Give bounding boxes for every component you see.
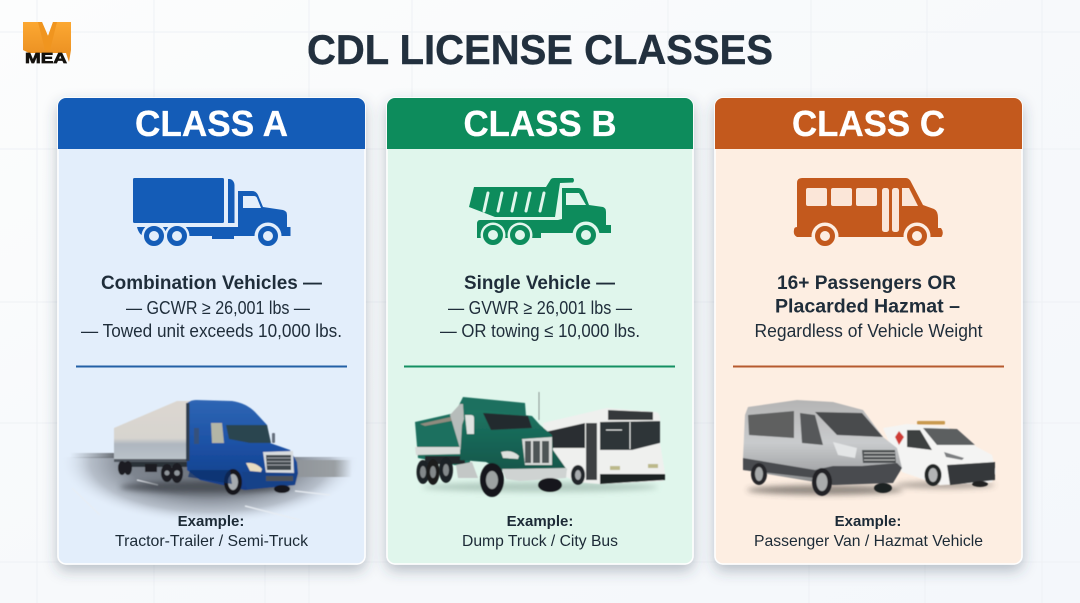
card C header bbox=[715, 98, 1022, 149]
card A description: — GCWR ≥ 26,001 lbs — bbox=[126, 298, 310, 318]
card A example: Tractor-Trailer / Semi-Truck bbox=[115, 533, 309, 550]
panel: Class A bbox=[58, 98, 365, 564]
card A example: Example: bbox=[178, 513, 244, 530]
photo: dump truck and city bus bbox=[415, 392, 665, 497]
card A description bbox=[81, 272, 342, 341]
card C description: Placarded Hazmat – bbox=[775, 296, 960, 318]
card A header: CLASS A bbox=[135, 103, 288, 144]
photo: passenger van and hazmat van bbox=[743, 400, 996, 496]
card C description: 16+ Passengers OR bbox=[777, 272, 956, 294]
card B example: Example: bbox=[507, 513, 573, 530]
card C description bbox=[754, 272, 982, 341]
card A description: — Towed unit exceeds 10,000 lbs. bbox=[81, 321, 342, 341]
card C example: Example: bbox=[835, 513, 901, 530]
card B description: — OR towing ≤ 10,000 lbs. bbox=[440, 321, 640, 341]
card B body bbox=[387, 98, 693, 564]
card B example: Dump Truck / City Bus bbox=[462, 533, 618, 550]
card C example bbox=[754, 513, 983, 550]
trailer bbox=[114, 401, 190, 461]
photo: tractor-trailer on highway bbox=[60, 400, 360, 525]
cab bbox=[187, 400, 298, 490]
icon: dump truck B bbox=[469, 178, 611, 248]
card C header: CLASS C bbox=[792, 103, 945, 144]
card A header bbox=[58, 98, 365, 149]
title: CDL LICENSE CLASSES bbox=[307, 26, 773, 73]
icon: small bus C bbox=[794, 178, 943, 250]
card A body bbox=[58, 98, 365, 564]
card C body bbox=[715, 98, 1022, 564]
bus bbox=[543, 408, 665, 484]
panel: Class B bbox=[387, 98, 693, 564]
card B example bbox=[462, 513, 618, 550]
card C description: Regardless of Vehicle Weight bbox=[754, 321, 982, 341]
card B header bbox=[387, 98, 693, 149]
card B header: CLASS B bbox=[464, 103, 616, 144]
card B description: — GVWR ≥ 26,001 lbs — bbox=[448, 298, 632, 318]
dump truck body bbox=[415, 397, 526, 468]
panel: Class C bbox=[715, 98, 1022, 564]
logo: MEA: MEA bbox=[25, 51, 68, 67]
icon: box truck A bbox=[133, 178, 290, 250]
passenger van bbox=[743, 400, 902, 485]
card C example: Passenger Van / Hazmat Vehicle bbox=[754, 533, 983, 550]
card B description bbox=[440, 272, 640, 341]
white van bbox=[883, 424, 996, 485]
card B description: Single Vehicle — bbox=[464, 272, 615, 294]
logo: MEA bbox=[23, 22, 71, 67]
card A description: Combination Vehicles — bbox=[101, 272, 322, 294]
card A example bbox=[115, 513, 309, 550]
